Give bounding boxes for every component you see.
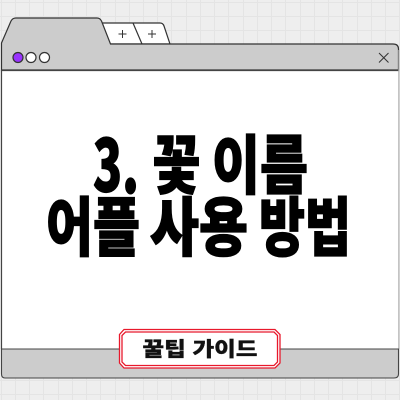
icon: white dot two	[40, 52, 50, 62]
icon: plus on tab two	[148, 30, 156, 38]
background tabs	[102, 23, 170, 44]
icon: purple dot	[13, 52, 23, 62]
window control dots	[13, 52, 50, 62]
window content area	[2, 70, 398, 350]
title line two: 사용	[150, 178, 248, 270]
icon: plus on tab one	[118, 30, 126, 38]
title line two	[46, 178, 351, 270]
icon: close cross	[379, 53, 388, 62]
title line two: 어플	[46, 178, 140, 270]
badge	[120, 330, 280, 368]
title line one	[93, 108, 308, 212]
bottom bar	[2, 349, 398, 378]
title line one: 꽃	[152, 116, 200, 208]
title	[46, 108, 351, 270]
badge label: 꿀팁 가이드	[142, 333, 258, 362]
window borders	[1, 70, 399, 349]
window title bar	[2, 18, 398, 70]
title line two: 방법	[259, 178, 351, 270]
icon: white dot one	[26, 52, 36, 62]
title line one: 이름	[212, 116, 308, 208]
title line one: 3.	[93, 108, 139, 212]
